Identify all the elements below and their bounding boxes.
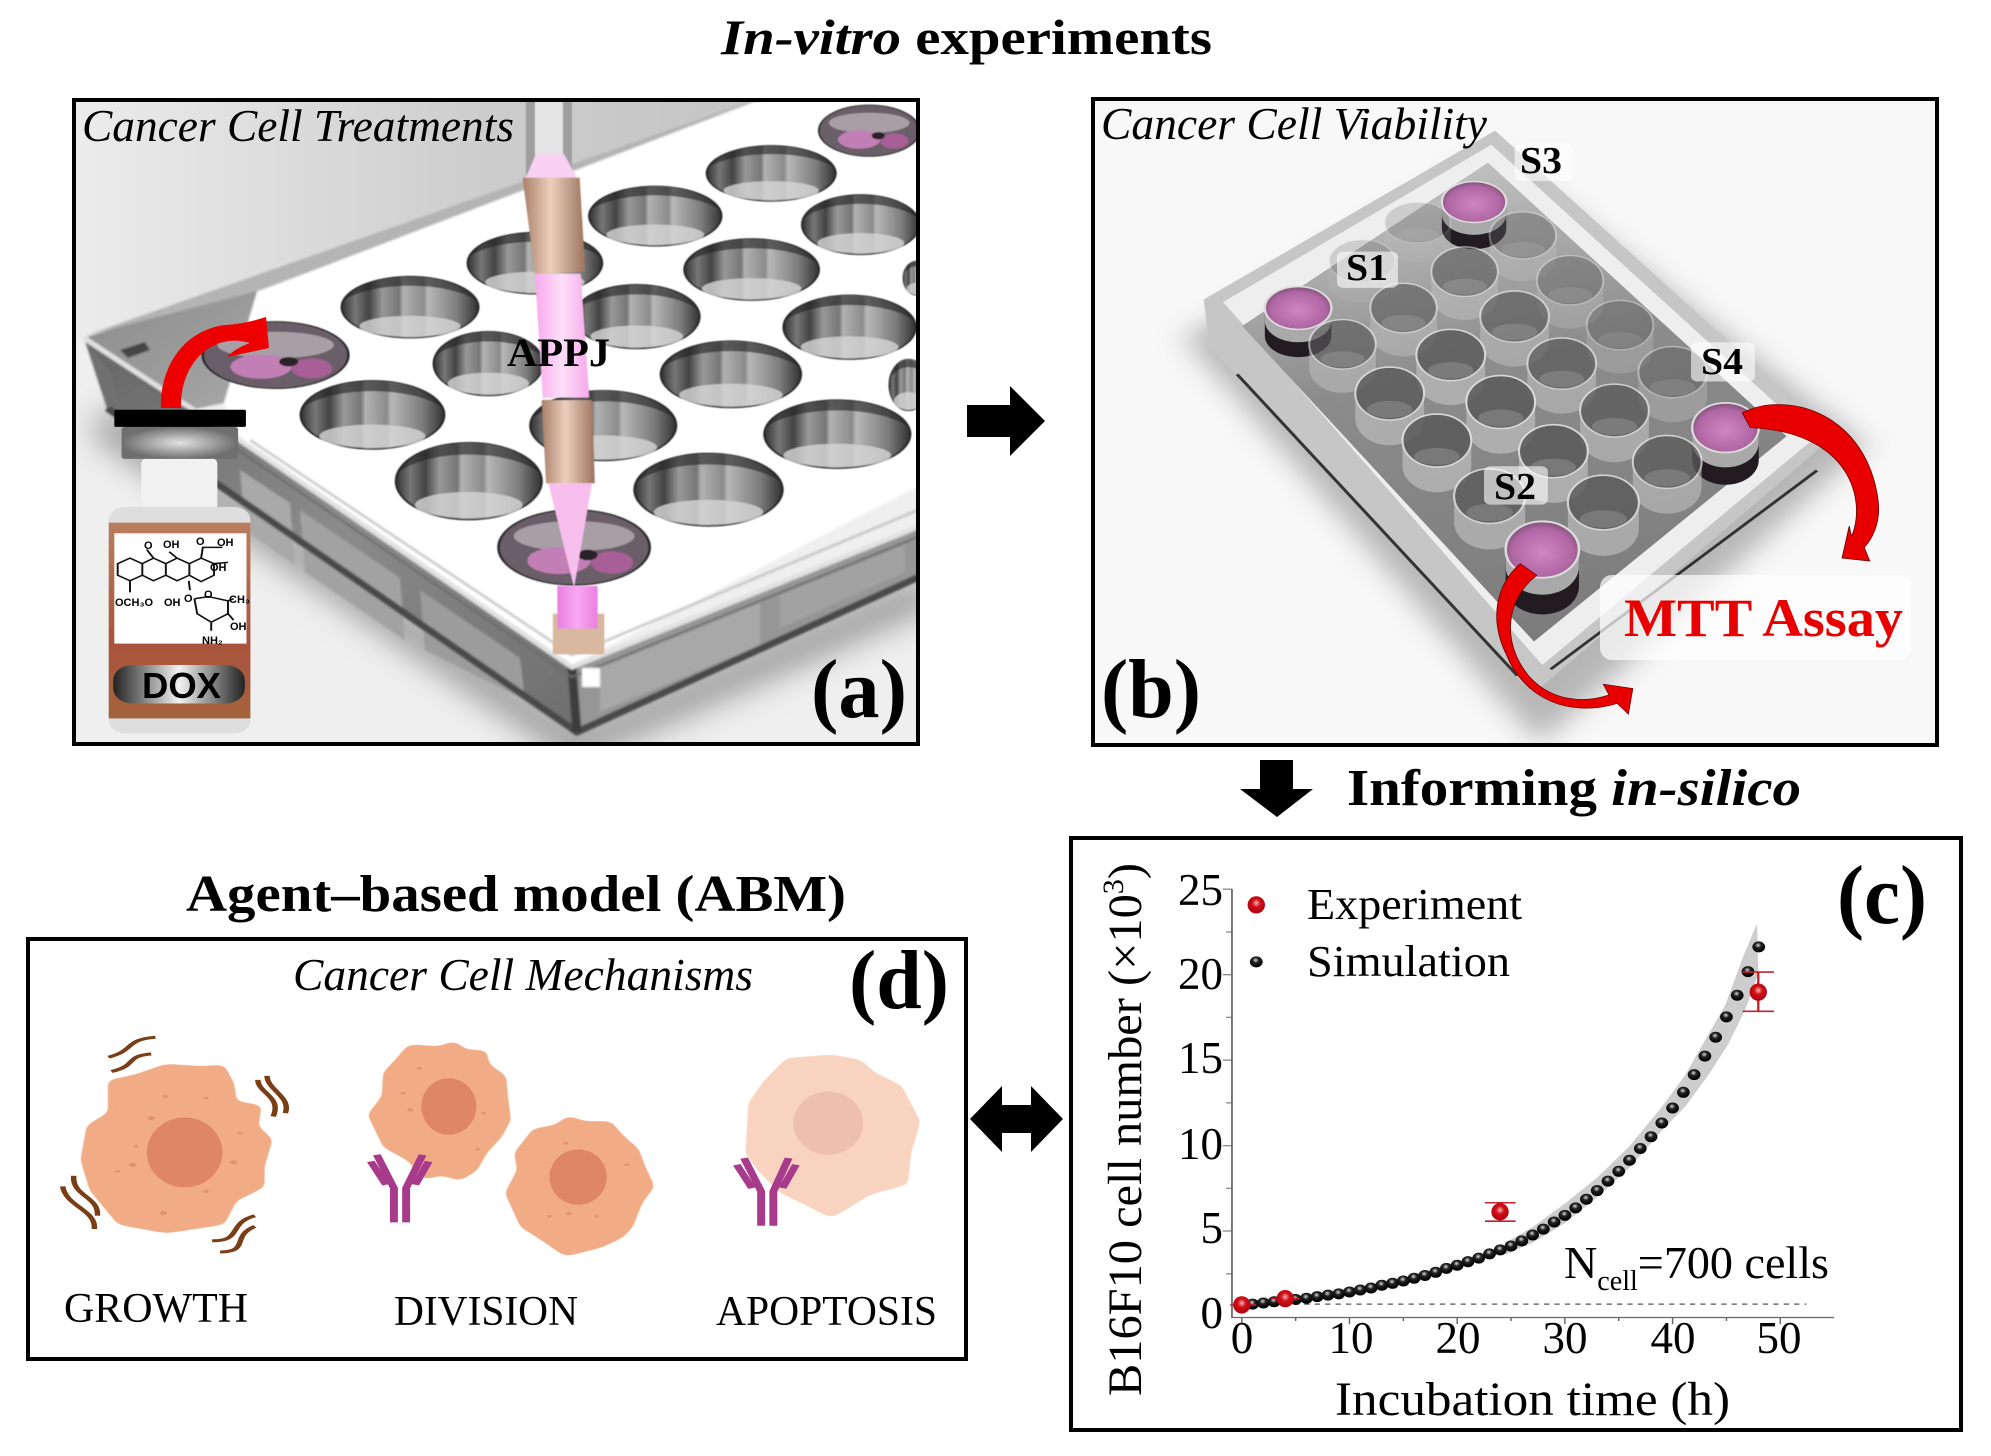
heading: cancer cell treatments: Cancer Cell Treatments <box>82 101 514 151</box>
y-axis tick labels <box>1178 865 1223 1338</box>
annotation: Ncell: =700 cells <box>1638 1237 1829 1288</box>
heading: agent-based model: Agent–based model (ABM) <box>186 866 846 923</box>
chart: cell number vs incubation time <box>1223 889 1834 1324</box>
label: (d): (d) <box>849 934 949 1027</box>
icon: DOX vial: O <box>144 540 153 552</box>
legend markers <box>1248 896 1265 967</box>
y-axis title: B16F10 cell number (×10 <box>1099 898 1152 1396</box>
icon: DOX vial <box>109 410 250 733</box>
y-axis tick labels: 20 <box>1178 949 1223 999</box>
label box: S labels: S4 <box>1701 341 1743 383</box>
icon: DOX vial: OH <box>210 562 227 574</box>
y-axis tick labels: 25 <box>1178 865 1223 915</box>
heading: cancer cell viability: Cancer Cell Viability <box>1101 99 1487 149</box>
icon: DOX vial: OH <box>217 537 234 549</box>
icon: DOX vial: CH₃ <box>229 594 250 606</box>
callout: MTT assay <box>1600 575 1911 660</box>
icon: DOX vial: O <box>184 593 193 605</box>
x-axis tick labels: 10 <box>1328 1313 1374 1363</box>
icon: DOX vial: OH <box>163 539 180 551</box>
title: in-vitro experiments: In-vitro experiments <box>720 9 1212 65</box>
label: (b): (b) <box>1101 643 1201 736</box>
x-axis tick labels: 40 <box>1650 1313 1696 1363</box>
icon: DOX vial: OH <box>164 597 181 609</box>
panel a: cancer cell treatments <box>74 90 931 745</box>
label: growth: GROWTH <box>64 1286 248 1332</box>
uncertainty band <box>1505 923 1758 1255</box>
y-axis tick labels: 5 <box>1200 1203 1223 1253</box>
x-axis tick labels: 20 <box>1436 1313 1480 1363</box>
x-axis tick labels <box>1231 1313 1802 1363</box>
callout: MTT assay: MTT Assay <box>1624 588 1903 648</box>
x-axis tick labels: 0 <box>1231 1313 1253 1363</box>
simulation points <box>1246 941 1765 1310</box>
panel c: growth chart <box>1071 838 1961 1430</box>
label box: S labels: S3 <box>1520 140 1562 182</box>
annotation: Ncell: N <box>1564 1237 1597 1288</box>
experiment points with error bars <box>1230 972 1774 1314</box>
panel b: cancer cell viability <box>1093 99 1937 745</box>
icon: growing cell <box>63 1037 286 1252</box>
icon: DOX vial: DOX <box>142 665 221 706</box>
y-axis title: 3 <box>1097 879 1130 894</box>
panel d: cancer cell mechanisms <box>28 934 966 1359</box>
heading: informing in-silico: Informing in-silico <box>1347 760 1801 817</box>
icon: dividing cells with antibody <box>371 1043 651 1255</box>
icon: red arrow into well <box>161 317 269 408</box>
icon: DOX vial: OH <box>230 621 247 633</box>
icon: DOX vial: O <box>204 589 213 601</box>
arrow: a to b <box>967 386 1045 456</box>
label: APPJ: APPJ <box>507 330 610 375</box>
y-axis title: ) <box>1099 863 1152 879</box>
label box: S labels: S1 <box>1346 247 1388 289</box>
legend: experiment: Experiment <box>1307 880 1522 929</box>
legend: simulation: Simulation <box>1307 937 1510 986</box>
x-axis tick labels: 50 <box>1756 1313 1802 1363</box>
arrow: down to in-silico <box>1240 760 1313 817</box>
icon: plasma jet APPJ <box>523 101 604 654</box>
icon: red arrow from S4 <box>1742 404 1879 561</box>
icon: apoptotic cell with antibody <box>737 1057 917 1226</box>
label: division: DIVISION <box>394 1289 578 1335</box>
icon: DOX vial: NH₂ <box>202 635 223 647</box>
label box: S labels <box>1337 140 1755 508</box>
y-axis tick labels: 10 <box>1178 1119 1223 1169</box>
icon: DOX vial: OCH₃O <box>115 597 154 609</box>
y-axis tick labels: 0 <box>1200 1288 1223 1338</box>
icon: DOX vial: O <box>196 536 205 548</box>
y-axis tick labels: 15 <box>1178 1033 1223 1083</box>
label: (a): (a) <box>811 643 907 736</box>
icon: red arrow from S2 <box>1497 564 1633 714</box>
label: (c): (c) <box>1837 849 1927 942</box>
heading: cancer cell mechanisms: Cancer Cell Mechanisms <box>293 949 753 1000</box>
label: apoptosis: APOPTOSIS <box>716 1289 937 1335</box>
x-axis title: Incubation time (h) <box>1335 1373 1730 1426</box>
x-axis tick labels: 30 <box>1542 1313 1588 1363</box>
arrow: double between d and c <box>970 1086 1063 1152</box>
annotation: Ncell: cell <box>1597 1266 1638 1297</box>
label box: S labels: S2 <box>1494 466 1536 508</box>
